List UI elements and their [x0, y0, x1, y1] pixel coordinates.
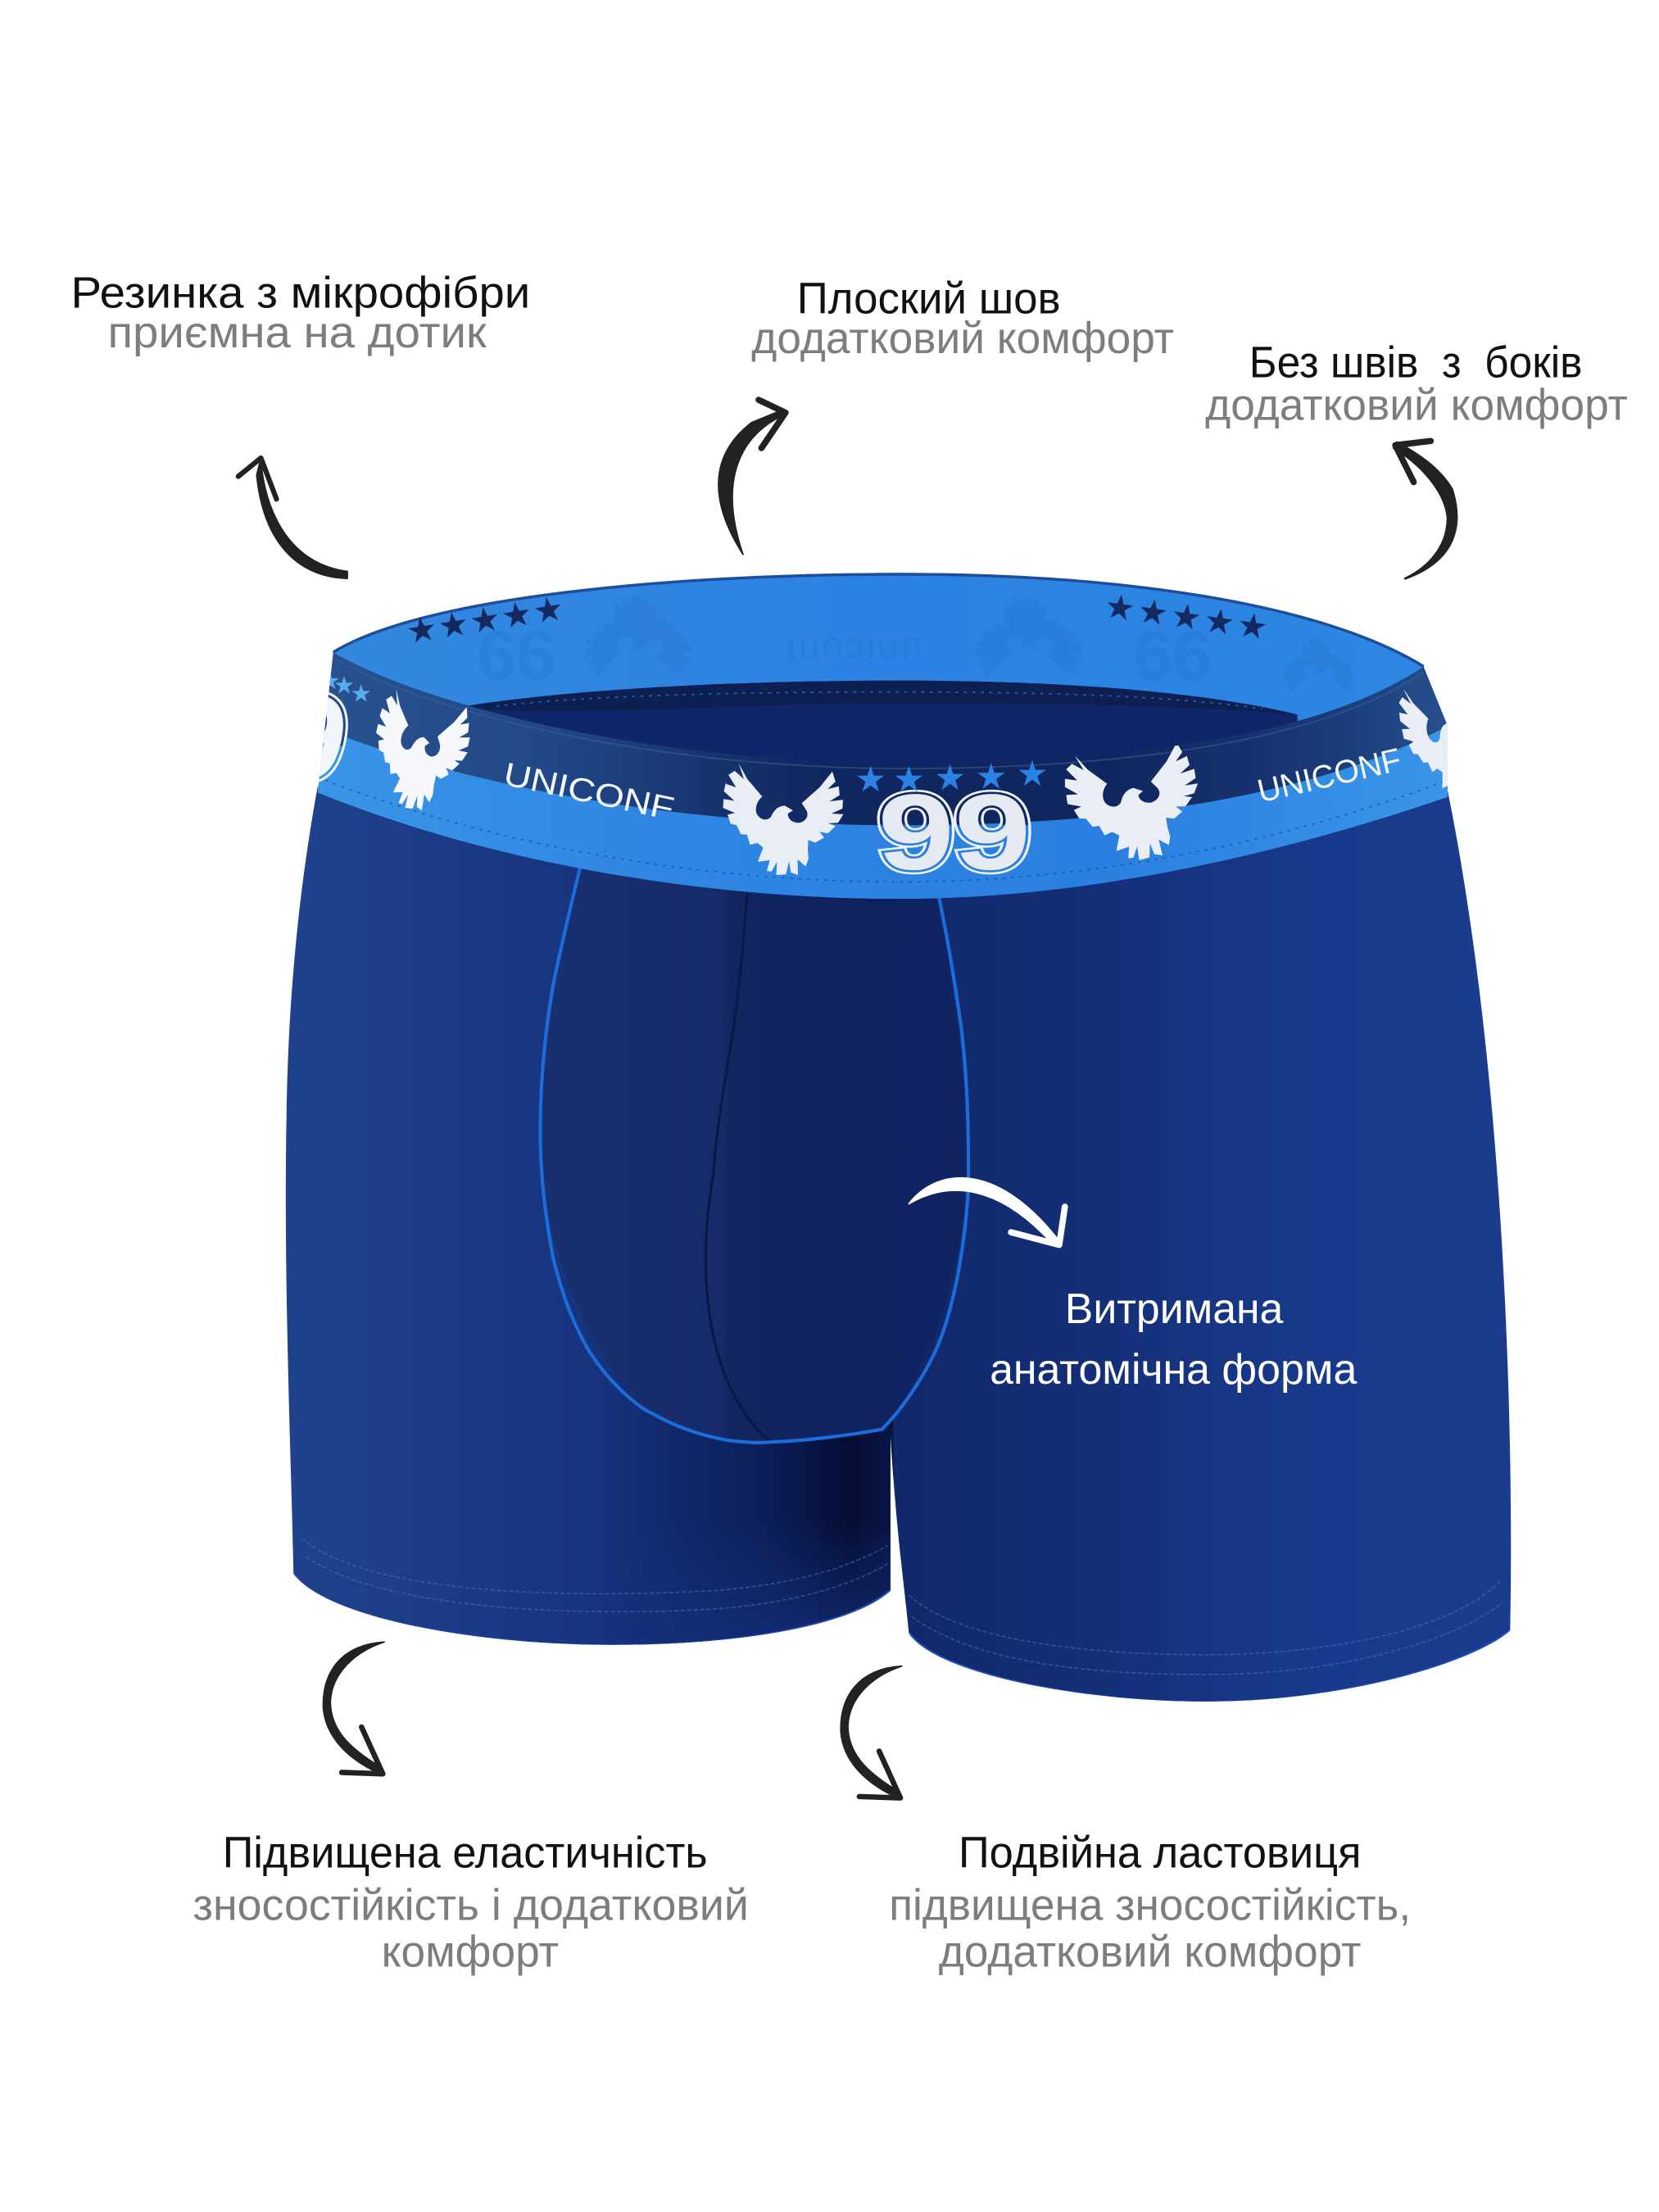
arrow: seamless sides callout: [1394, 441, 1457, 578]
front band blue stars: ★: [1017, 754, 1048, 795]
garment interior: [456, 681, 1298, 780]
product: navy boxer briefs: [265, 573, 1511, 1703]
arrow: waistband callout: [238, 458, 347, 578]
blue piping: [540, 868, 968, 1443]
ghost prints on inner band: uniconf: [783, 630, 922, 672]
number 99: 99: [877, 772, 1031, 892]
callout: anatomical shape: Витримана: [1065, 1285, 1283, 1333]
front band side stars: ★: [319, 667, 341, 695]
hem stitching: left leg: [302, 1432, 887, 1620]
front band blue stars: ★: [893, 759, 925, 800]
heading: seamless sides: Без швів з боків: [1249, 338, 1583, 387]
subheading: double gusset: підвищена зносостійкість,: [889, 1880, 1411, 1929]
heading: elasticity: Підвищена еластичність: [223, 1828, 708, 1877]
subheading: elasticity: [193, 1880, 749, 1977]
body shading: [293, 1362, 1510, 1703]
white arrow: anatomical shape: [909, 1178, 1065, 1245]
number 99: [877, 790, 1031, 875]
eagle emblems: [376, 688, 1448, 875]
garment body: [286, 787, 1511, 1702]
front waistband: [265, 652, 1504, 899]
hem stitching: right leg: [909, 1581, 1503, 1675]
light blue stripe: [318, 726, 1448, 899]
ghost prints on inner band: 99: [477, 615, 555, 694]
partial 99 on the left: 9: [265, 664, 359, 810]
partial 99 on the left: [319, 691, 348, 782]
subheading: elasticity: комфорт: [382, 1928, 559, 1977]
heading: flat seam: Плоский шов: [797, 274, 1061, 323]
uniconf logo left: UNICONF: [501, 756, 678, 827]
heading: waistband: Резинка з мікрофібри: [71, 269, 530, 318]
uniconf logo right: UNICONF: [1254, 741, 1404, 809]
callout: anatomical shape: [990, 1285, 1357, 1394]
arrow: flat seam callout: [718, 400, 786, 555]
subheading: waistband: приємна на дотик: [108, 308, 487, 357]
ghost prints on inner band: [477, 596, 1354, 695]
inner-back stars left: ★★★★★: [403, 587, 566, 652]
inner-back stars right: ★★★★★: [1102, 585, 1271, 648]
front band side stars: [329, 674, 370, 701]
partial 99 on the left: 9: [265, 664, 359, 810]
partial 99 on the left: 9: [265, 664, 359, 810]
pouch: [540, 868, 968, 1443]
stripe stitching: [318, 777, 1448, 882]
back waistband edge: [333, 574, 1424, 666]
subheading: elasticity: зносостійкість і додатковий: [193, 1880, 749, 1929]
front band blue stars: ★: [854, 759, 886, 800]
subheading: seamless sides: додатковий комфорт: [1205, 380, 1628, 429]
center seam: [705, 893, 772, 1442]
arrow: elasticity callout: [324, 1642, 384, 1774]
ghost prints on inner band: 99: [1134, 615, 1213, 694]
subheading: double gusset: додатковий комфорт: [939, 1928, 1362, 1977]
heading: double gusset: Подвійна ластовиця: [959, 1828, 1362, 1877]
front band blue stars: ★: [975, 756, 1007, 797]
number 99: 99: [877, 772, 1031, 892]
front band side stars: ★: [350, 680, 372, 708]
front band blue stars: [857, 760, 1045, 791]
front band blue stars: ★: [934, 758, 966, 799]
subheading: double gusset: [889, 1880, 1411, 1977]
arrow: double gusset callout: [841, 1666, 902, 1798]
subheading: flat seam: додатковий комфорт: [751, 314, 1174, 363]
callout: anatomical shape: анатомічна форма: [990, 1346, 1357, 1394]
band top edge seam: [333, 658, 1424, 768]
front band side stars: ★: [333, 671, 355, 699]
number 99: 99: [877, 772, 1031, 892]
waistband inside back: [326, 573, 1432, 780]
